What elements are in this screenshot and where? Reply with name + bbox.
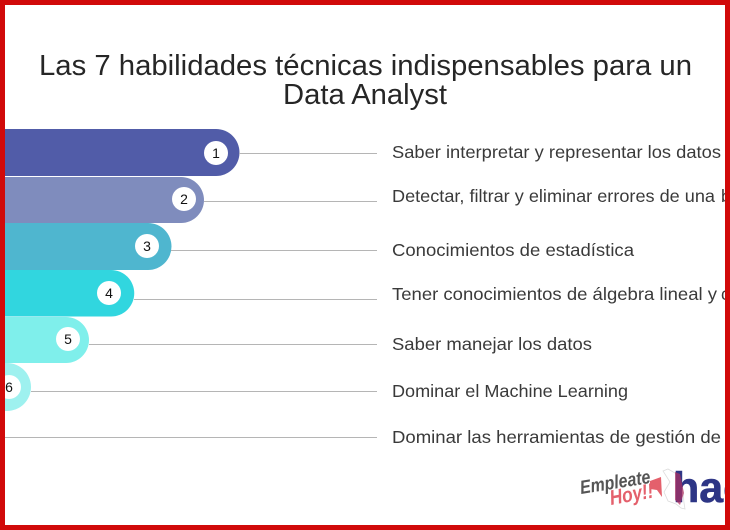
number 4 xyxy=(97,281,121,305)
bar 2 xyxy=(0,177,204,223)
bar 4 xyxy=(0,270,134,316)
skill 1: Saber interpretar y representar los datos xyxy=(392,142,721,162)
bar 5 xyxy=(0,317,89,363)
number 3: 3 xyxy=(143,238,151,254)
skill 7: Dominar las herramientas de gestión de xyxy=(392,427,721,447)
logo: overlap xyxy=(675,472,684,505)
number 2: 2 xyxy=(180,191,188,207)
bar 1 xyxy=(0,129,239,176)
connector 5 xyxy=(89,344,377,346)
logo: Empleate: Empleate xyxy=(578,467,652,499)
title xyxy=(39,50,692,111)
logo: red map xyxy=(650,477,662,497)
connector 7 xyxy=(0,436,377,438)
number 5 xyxy=(56,327,80,351)
bar 6 xyxy=(0,363,31,411)
number 1: 1 xyxy=(212,145,220,161)
logo: map outline xyxy=(663,469,685,509)
title: Data Analyst xyxy=(283,79,447,111)
logo xyxy=(578,464,730,512)
skill 3: Conocimientos de estadística xyxy=(392,240,634,260)
funnel bars xyxy=(0,129,239,411)
number 6 xyxy=(0,375,21,399)
number 3 xyxy=(135,234,159,258)
bar 3 xyxy=(0,223,172,270)
number 1 xyxy=(204,141,228,165)
number 5: 5 xyxy=(64,331,72,347)
connector 2 xyxy=(204,200,377,202)
skill 4: Tener conocimientos de álgebra lineal y xyxy=(392,284,717,304)
title: Las 7 habilidades técnicas indispensables para un xyxy=(39,50,692,82)
number 2 xyxy=(172,187,196,211)
skill 6: Dominar el Machine Learning xyxy=(392,381,628,401)
connector 4 xyxy=(134,298,377,300)
number 6: 6 xyxy=(5,379,13,395)
skill 2: Detectar, filtrar y eliminar errores de una xyxy=(392,186,715,206)
connector 3 xyxy=(171,250,377,252)
skill 5: Saber manejar los datos xyxy=(392,334,592,354)
number 4: 4 xyxy=(105,285,113,301)
connector 1 xyxy=(239,152,377,154)
connector 6 xyxy=(31,390,377,392)
logo: Hoy: Hoy!! xyxy=(608,480,655,510)
